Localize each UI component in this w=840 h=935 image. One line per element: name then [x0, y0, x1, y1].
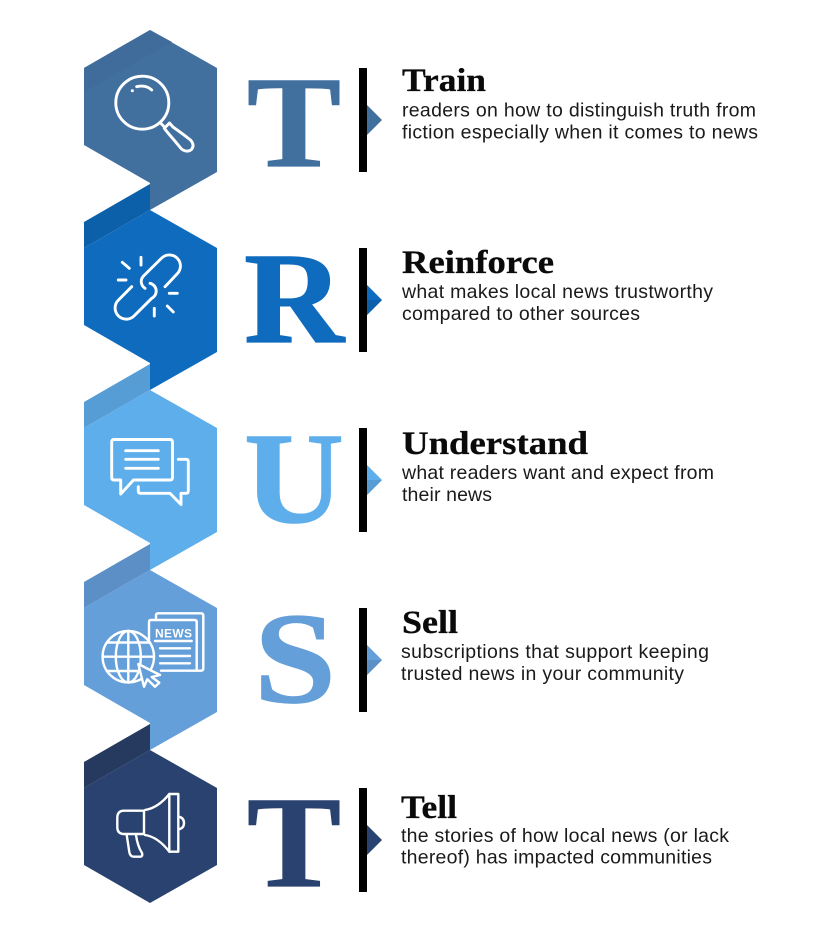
- text block: Train: fiction especially when it comes to news: [402, 122, 758, 144]
- text block: Sell: [401, 605, 709, 685]
- text block: Reinforce: compared to other sources: [402, 303, 640, 325]
- text block: Tell: [401, 790, 729, 868]
- divider and arrow: Understand: [359, 428, 382, 532]
- text block: Reinforce: [401, 245, 713, 325]
- text block: Understand: their news: [402, 484, 492, 506]
- icon: megaphone: [117, 794, 184, 857]
- text block: Tell: thereof) has impacted communities: [401, 846, 712, 868]
- divider and arrow: Reinforce: [359, 248, 382, 352]
- text block: Understand: what readers want and expect from: [401, 462, 714, 484]
- text block: Understand: [401, 426, 714, 506]
- icon: globe and newspaper: NEWS: [155, 626, 192, 640]
- icon: broken chain link: [115, 255, 180, 319]
- icon: chat bubbles: [112, 440, 188, 504]
- panel: Understand hexagon: [84, 364, 217, 570]
- text block: Reinforce: Reinforce: [402, 245, 554, 281]
- text block: Tell: Tell: [401, 790, 457, 826]
- panel: Sell hexagon: [84, 544, 217, 750]
- divider and arrow: Tell: [359, 788, 382, 892]
- icon: globe and newspaper: [103, 613, 203, 687]
- text block: Understand: Understand: [402, 426, 588, 462]
- letter T: T: [247, 51, 341, 195]
- panel: Train hexagon: [84, 30, 217, 210]
- icon: magnifying glass: [116, 76, 193, 151]
- text block: Train: Train: [402, 63, 486, 99]
- divider and arrow: Train: [359, 68, 382, 172]
- letter S: S: [254, 587, 336, 731]
- letter U: U: [244, 407, 344, 551]
- letter T: T: [247, 771, 341, 915]
- panel: Tell hexagon: [84, 724, 217, 903]
- letter R: R: [244, 227, 346, 371]
- divider and arrow: Sell: [359, 608, 382, 712]
- text block: Sell: subscriptions that support keeping: [401, 641, 709, 663]
- panel: Reinforce hexagon: [84, 184, 217, 390]
- text block: Train: [402, 63, 758, 144]
- text block: Train: readers on how to distinguish truth from: [402, 100, 756, 122]
- text block: Tell: the stories of how local news (or lack: [401, 825, 729, 847]
- text block: Sell: Sell: [402, 605, 458, 641]
- text block: Sell: trusted news in your community: [401, 663, 684, 685]
- text block: Reinforce: what makes local news trustworthy: [401, 281, 713, 303]
